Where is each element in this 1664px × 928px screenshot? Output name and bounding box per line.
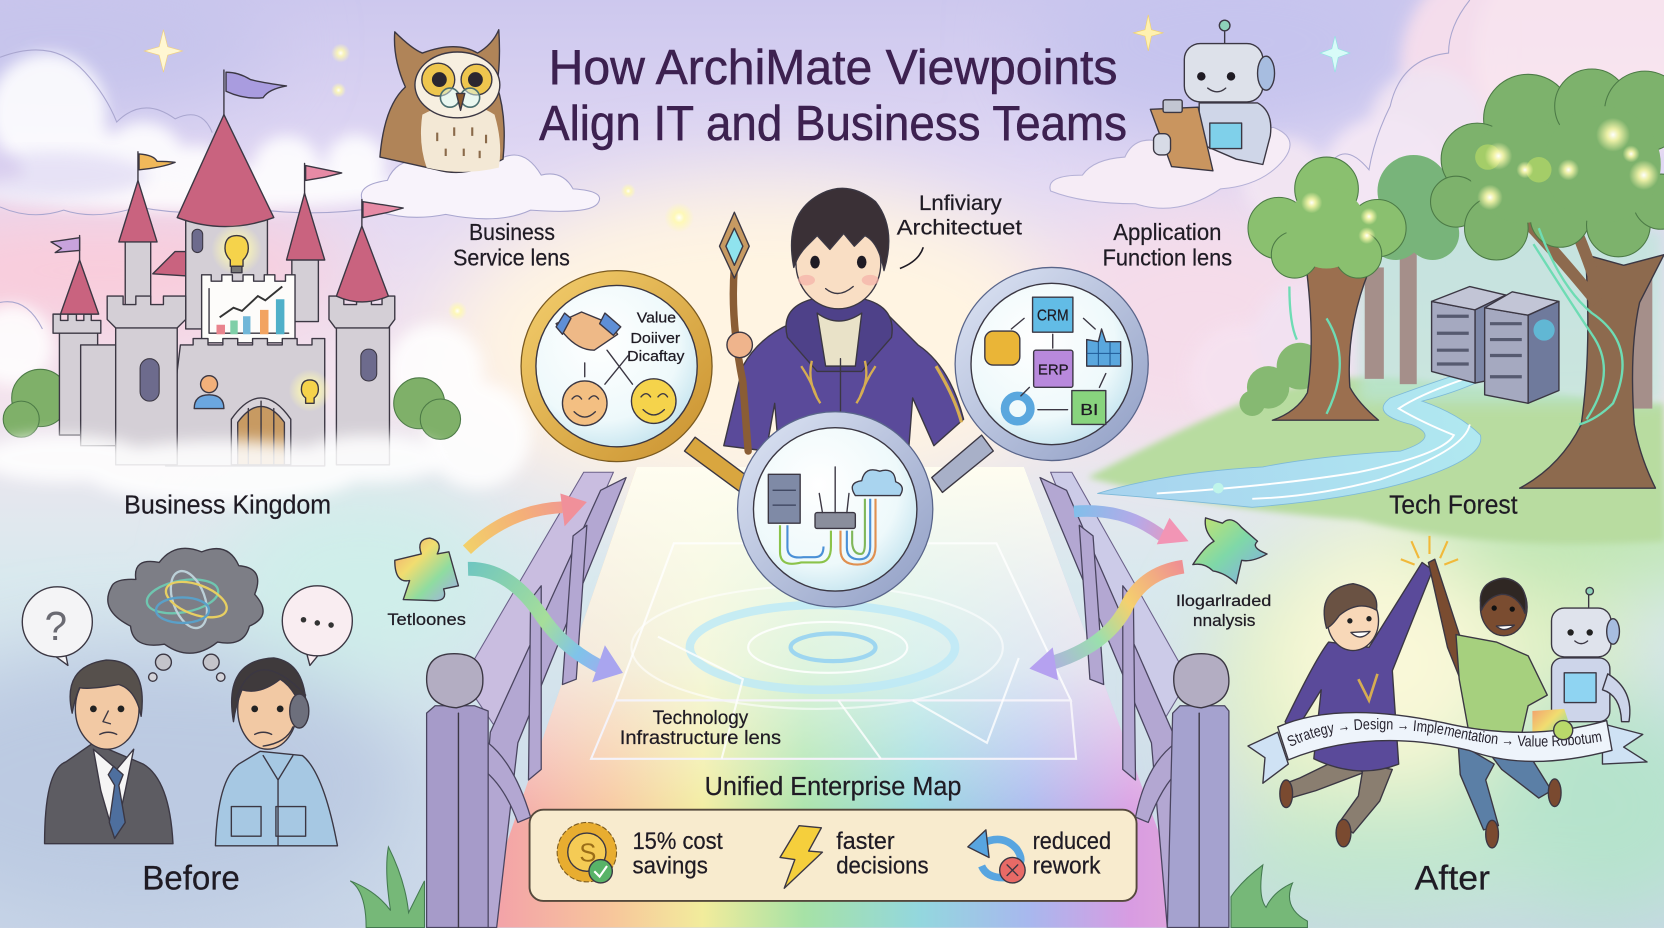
chart panel — [202, 275, 295, 343]
lens text: Dicaftay — [627, 349, 685, 365]
icon: coin: S — [579, 840, 596, 868]
person: wizard — [1280, 562, 1433, 847]
robot with clipboard on cloud — [1050, 20, 1290, 208]
lens: Technology Infrastructure — [738, 412, 933, 607]
left big tower — [107, 296, 186, 465]
text: cost savings — [632, 828, 723, 879]
background haze — [1358, 228, 1664, 403]
label: Application Function lens: Function lens — [1103, 244, 1232, 270]
smile faces — [562, 379, 676, 426]
text: cost savings: savings — [632, 852, 708, 879]
icon: reduced rework — [968, 830, 1025, 883]
label: Business Service lens: Business — [469, 219, 555, 245]
ERP box: ERP — [1038, 363, 1069, 379]
icon: person and bulb on wall — [194, 369, 331, 412]
arrow: tech to map lower — [1029, 567, 1183, 680]
rainbow floor — [478, 467, 1194, 928]
label: Application Function lens — [1103, 219, 1232, 270]
fireflies — [1213, 118, 1659, 493]
label: Business Service lens — [453, 219, 570, 270]
river — [1097, 366, 1507, 507]
arrow: business to map upper — [467, 493, 587, 550]
left rail — [427, 472, 626, 928]
label: Unitary Architect: Architectuet — [897, 217, 1022, 240]
puzzle piece right — [1193, 518, 1267, 584]
label: right puzzle: nnalysis — [1193, 611, 1255, 630]
CRM box — [1033, 297, 1073, 332]
panel: benefits — [530, 810, 1137, 901]
arrow: tech to map upper — [1074, 511, 1189, 544]
label: After: After — [1415, 859, 1490, 897]
before: misaligned teams — [22, 548, 352, 846]
robe — [724, 306, 964, 467]
speech bubble: dots — [282, 586, 352, 665]
text: reduced rework: reduced — [1033, 828, 1111, 855]
head — [796, 218, 881, 309]
person: business partner — [1428, 559, 1561, 848]
background tree trunks — [1365, 233, 1652, 409]
castle: Business Kingdom — [0, 70, 461, 504]
wizard architect — [720, 188, 964, 467]
ribbon: delivery path: Strategy → Design → Implementation → Value Robotum — [1288, 718, 1602, 747]
ground — [1088, 377, 1664, 544]
left slender tower — [119, 152, 175, 307]
lens text — [627, 311, 685, 365]
label: Technology Infrastructure lens — [620, 707, 781, 749]
label: Technology Infrastructure lens: Technology — [653, 707, 748, 729]
forest: Tech Forest — [1088, 69, 1664, 544]
staff — [733, 267, 748, 451]
ribbon: delivery path — [1247, 712, 1648, 784]
bushes near trees — [1240, 343, 1323, 416]
text: reduced rework — [1033, 828, 1111, 879]
cloud icon — [852, 470, 902, 496]
cloud under owl — [361, 154, 600, 219]
CRM box: CRM — [1037, 307, 1069, 324]
speech bubble: question — [22, 587, 92, 665]
label: Application Function lens: Application — [1113, 219, 1221, 245]
door — [231, 398, 291, 465]
servers — [1432, 287, 1559, 403]
person: business man — [45, 660, 173, 844]
text: faster decisions: decisions — [836, 852, 929, 879]
arrow: business to map lower — [468, 569, 623, 682]
label: Unified Enterprise Map: Unified Enterprise Map — [705, 773, 961, 801]
lens text: Value — [637, 311, 676, 327]
inner wall — [81, 345, 117, 446]
speech bubble: question: ? — [45, 603, 67, 649]
small rainbow puzzle held — [1532, 709, 1575, 751]
title: Align IT and Business Teams — [539, 97, 1127, 151]
celebration sparks — [1401, 536, 1458, 565]
clouds: right sky — [1189, 0, 1664, 430]
label: Unitary Architect — [897, 192, 1022, 268]
robot companion — [1552, 587, 1630, 722]
handshake icon — [556, 312, 621, 350]
person: IT engineer — [215, 658, 337, 846]
router icon — [815, 467, 855, 528]
back gable — [153, 252, 187, 276]
clouds: left sky — [0, 50, 531, 488]
right rail — [1040, 472, 1229, 928]
label: Technology Infrastructure lens: Infrastructure lens — [620, 727, 781, 749]
icon: coin — [557, 822, 617, 883]
label: Before: Before — [142, 859, 240, 897]
BI box: BI — [1080, 402, 1098, 419]
text: reduced rework: rework — [1033, 852, 1101, 879]
icon: lightning — [780, 826, 822, 888]
server icon — [768, 474, 800, 523]
big tree — [1431, 69, 1664, 488]
sparkles in sky — [144, 15, 1350, 320]
map panel — [591, 543, 1076, 759]
lens: Application Function — [932, 267, 1148, 492]
label: right puzzle — [1176, 593, 1271, 630]
lens text: Doiiver — [630, 331, 680, 347]
label: Tech Forest: Tech Forest — [1389, 492, 1518, 520]
label: Unitary Architect: Lnfiviary — [919, 192, 1002, 215]
text: faster decisions — [836, 828, 929, 879]
label: right puzzle: Ilogarlraded — [1176, 593, 1271, 610]
label: Business Kingdom: Business Kingdom — [124, 492, 331, 520]
grass tufts — [350, 847, 1307, 928]
main wall — [166, 339, 325, 466]
cloud under robot — [1050, 127, 1290, 208]
lens: Business Service — [521, 271, 749, 492]
text: cost savings: 15% cost — [632, 828, 723, 855]
text: faster decisions: faster — [836, 828, 895, 855]
owl on cloud — [361, 30, 600, 219]
title: How ArchiMate Viewpoints — [549, 41, 1117, 95]
bars tile — [1087, 329, 1121, 366]
bridge with rainbow floor — [350, 467, 1307, 928]
glowing vines — [1289, 228, 1623, 424]
thought cloud with tangle — [108, 548, 263, 653]
right big tower — [329, 200, 403, 465]
BI box — [1072, 391, 1106, 424]
middle tree — [1248, 157, 1406, 420]
label: left puzzle: Tetloones — [387, 610, 466, 629]
main tower — [177, 70, 287, 329]
far left tower — [51, 236, 101, 435]
swirl on the map — [631, 586, 1003, 709]
puzzle piece left — [395, 538, 458, 601]
ERP box — [1034, 350, 1073, 387]
cables — [780, 499, 876, 565]
title — [539, 41, 1127, 151]
after: aligned teams — [1247, 536, 1648, 849]
right slender tower — [287, 163, 342, 322]
label: Business Service lens: Service lens — [453, 244, 570, 270]
icon: bushes — [3, 369, 461, 439]
cloud at castle base — [0, 435, 446, 504]
back tree — [1369, 155, 1459, 260]
